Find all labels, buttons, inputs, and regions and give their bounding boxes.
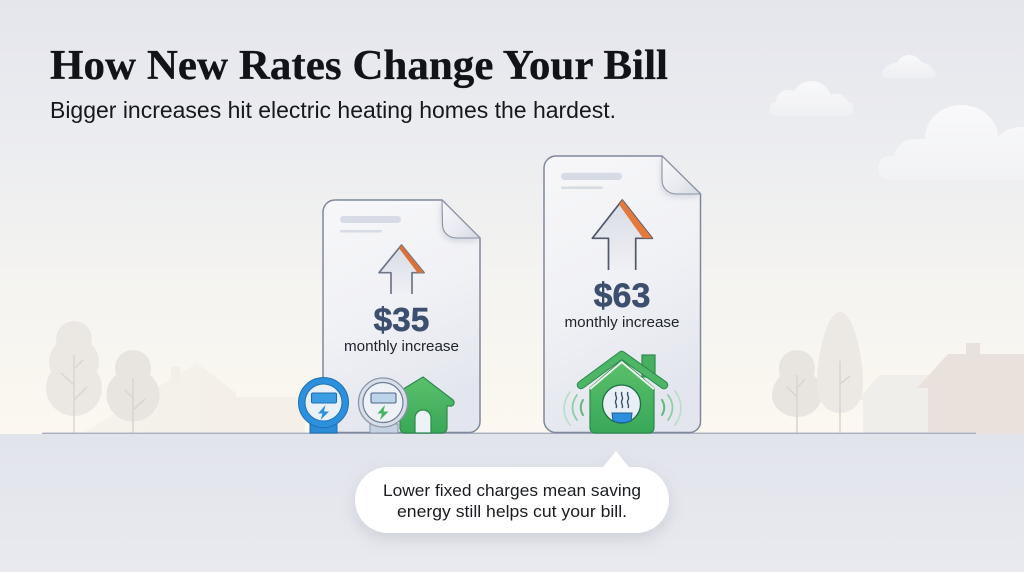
tree 4	[817, 312, 863, 433]
icon: blue meter	[298, 378, 348, 433]
left background scenery	[46, 321, 305, 433]
heat waves	[564, 391, 681, 425]
page fold	[442, 200, 480, 238]
page fold	[662, 156, 700, 194]
chimney	[642, 355, 655, 377]
cloud: small	[882, 55, 936, 78]
caption: monthly increase	[344, 338, 459, 355]
background house large	[917, 343, 1024, 434]
right background scenery	[772, 312, 1024, 434]
ground	[0, 434, 1024, 572]
background house small	[857, 375, 930, 433]
panel: $63 bill	[544, 156, 701, 433]
house body	[590, 360, 654, 433]
subtitle: Bigger increases hit electric heating homes the hardest.	[50, 97, 616, 123]
icon: up arrow	[379, 245, 424, 294]
speech bubble	[355, 451, 669, 533]
caption: monthly increase	[564, 314, 680, 331]
placeholder lines	[340, 216, 401, 232]
bill sheet	[323, 200, 480, 433]
amount: $63	[594, 277, 650, 315]
ground line	[42, 433, 976, 434]
tree 1	[46, 321, 102, 433]
callout text: Lower fixed charges mean saving	[383, 482, 641, 500]
placeholder lines	[561, 173, 622, 189]
background sky	[0, 0, 1024, 434]
panel: $35 bill	[298, 200, 480, 433]
callout text: energy still helps cut your bill.	[397, 503, 627, 521]
cloud: large	[878, 105, 1024, 180]
clouds	[769, 55, 1024, 180]
tree 2	[106, 350, 160, 433]
roof	[581, 355, 664, 385]
title: How New Rates Change Your Bill	[50, 43, 668, 89]
icon: up arrow	[592, 200, 652, 270]
callout	[355, 451, 669, 533]
background house left	[83, 363, 305, 433]
cloud: medium	[769, 81, 853, 116]
icon: green house	[400, 377, 454, 433]
amount: $35	[374, 302, 429, 339]
tree 3	[772, 350, 822, 433]
heater dial	[602, 385, 640, 423]
bill sheet	[544, 156, 701, 433]
icon: heated home	[564, 355, 681, 433]
icon: silver meter	[358, 378, 408, 433]
